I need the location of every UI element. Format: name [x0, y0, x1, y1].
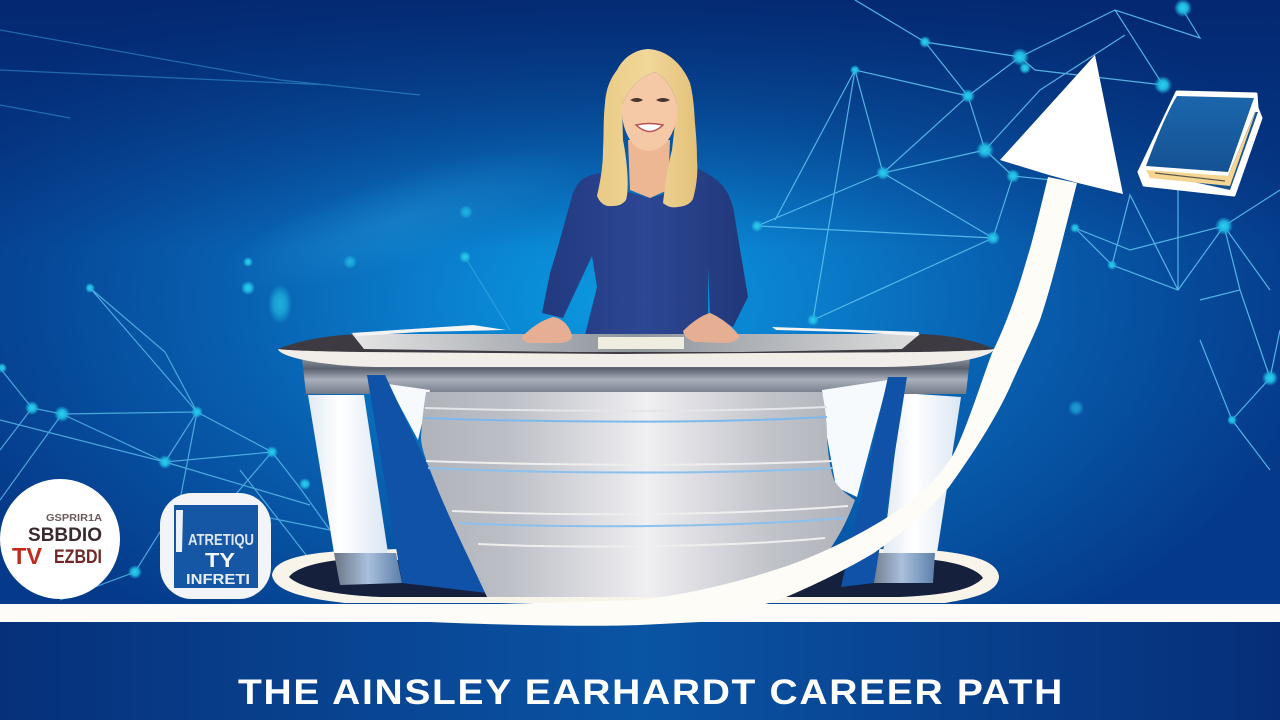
logo: round TV badge — [0, 479, 120, 599]
desk tray surface — [352, 334, 920, 352]
neck and chest — [628, 140, 670, 198]
logo: round TV badge: SBBDIO — [28, 525, 102, 546]
columns — [308, 395, 388, 553]
growth arrow — [430, 55, 1123, 626]
tray upper edges — [351, 325, 919, 336]
drum stripes — [423, 407, 848, 546]
eyes — [630, 98, 670, 102]
logo: round TV badge: TV — [12, 543, 43, 569]
logo: square TV badge — [160, 493, 271, 599]
face — [622, 72, 677, 151]
dress — [542, 168, 748, 335]
network: lower left nodes — [0, 205, 473, 579]
papers on desk — [598, 337, 684, 349]
news desk — [272, 325, 999, 603]
central drum — [421, 392, 855, 597]
logo: square TV badge: ATRETIQU — [188, 532, 254, 549]
chrome band under top — [302, 358, 970, 394]
logo: round TV badge: GSPRIR1A — [46, 513, 102, 524]
logo: round TV badge: EZBDI — [54, 547, 102, 568]
hair — [597, 49, 697, 207]
network: upper right — [757, 0, 1280, 470]
horizon stripe — [0, 604, 1280, 622]
bottom band — [0, 622, 1280, 720]
smile — [636, 124, 663, 132]
title: THE AINSLEY EARHARDT CAREER PATH — [238, 673, 1064, 712]
network: upper right nodes — [751, 0, 1278, 425]
blue side wedges — [367, 375, 487, 593]
network: lower left — [0, 30, 510, 600]
floor ring — [272, 549, 999, 603]
logo: square TV badge: INFRETI — [186, 571, 250, 588]
desk top — [278, 334, 994, 367]
white side panels — [388, 380, 888, 497]
presenter — [542, 49, 748, 335]
icon: book — [1139, 92, 1261, 195]
hands — [522, 313, 740, 343]
logo: square TV badge: TY — [205, 550, 236, 572]
